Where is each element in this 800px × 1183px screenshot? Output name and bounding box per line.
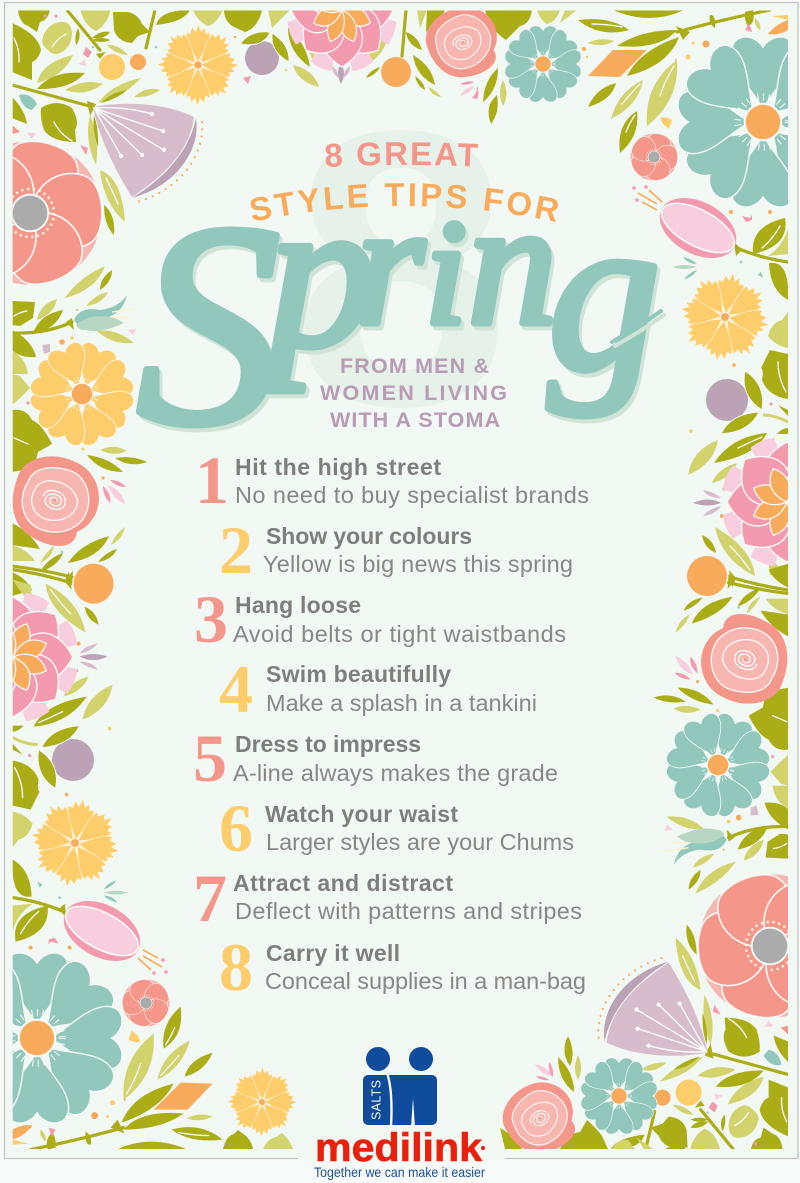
tagline: Together we can make it easier <box>314 1164 485 1180</box>
foliage: lower half of border <box>12 564 789 1152</box>
tip 3: 3 <box>194 581 228 657</box>
tip 5: Dress to impress <box>235 731 421 757</box>
logo: medilink <box>314 1047 485 1180</box>
subheading: WITH A STOMA <box>330 408 500 432</box>
tip 1: No need to buy specialist brands <box>235 482 589 508</box>
tip 2: 2 <box>219 512 253 588</box>
watermark numeral 8: 8 <box>292 50 510 488</box>
swash on g <box>612 311 661 342</box>
flower: right rose <box>701 614 788 704</box>
flower: top rose <box>426 10 497 78</box>
flower: top teal daisy <box>505 26 581 102</box>
flower: top pink lotus <box>288 10 396 71</box>
flower: right pink lotus <box>722 438 788 566</box>
tip 3: Avoid belts or tight waistbands <box>233 621 566 647</box>
wordmark: medilink <box>315 1126 483 1170</box>
flower: left coral anemone <box>12 142 102 285</box>
heading: style tips for: STYLE TIPS FOR <box>250 183 558 222</box>
tip 6 <box>219 790 574 866</box>
tip 3: Hang loose <box>235 592 361 618</box>
registered mark <box>481 1146 485 1150</box>
flower: bottom teal daisy <box>581 1058 657 1134</box>
tip 6: 6 <box>219 790 253 866</box>
heading: 8 great: 8 GREAT <box>326 142 478 167</box>
flower: lower left tulip <box>64 901 168 975</box>
heading: Spring script title: S <box>136 164 281 485</box>
foliage: upper half of border <box>12 8 788 596</box>
flower: right coral anemone <box>698 874 788 1018</box>
foliage: top centre <box>54 10 614 124</box>
tip 2: Show your colours <box>266 523 472 549</box>
flower: left pink lotus <box>12 592 78 721</box>
tip 4: Make a splash in a tankini <box>266 690 537 716</box>
flower: bottom right mauve bud <box>598 958 708 1056</box>
tip 7: Attract and distract <box>233 870 453 896</box>
logo mark: two figures: SALTS <box>370 1080 384 1120</box>
tip 5: 5 <box>193 720 227 796</box>
tip 4 <box>219 651 537 727</box>
tip 8: 8 <box>219 929 253 1005</box>
tip 6: Watch your waist <box>265 801 458 827</box>
tip 5 <box>193 720 558 796</box>
subheading <box>320 354 507 432</box>
tip 7 <box>193 860 582 936</box>
flower: top right small anemone <box>630 134 678 180</box>
flower: top yellow flower <box>157 24 239 106</box>
flower: bottom left small anemone <box>122 980 170 1026</box>
flower: lower left yellow flower <box>30 798 120 888</box>
tip 6: Larger styles are your Chums <box>266 829 574 855</box>
flower: top left mauve bud <box>93 104 202 202</box>
tip 1: Hit the high street <box>235 454 441 480</box>
heading: Spring script title: i <box>425 190 467 356</box>
flower: bottom yellow flower <box>227 1067 297 1137</box>
logo mark: two figures <box>363 1047 437 1127</box>
flower: upper right yellow flower <box>680 272 770 362</box>
tip 7: 7 <box>193 860 227 936</box>
flower: left yellow daisy <box>30 342 134 446</box>
tip 8: Conceal supplies in a man-bag <box>265 968 586 994</box>
tip 7: Deflect with patterns and stripes <box>235 898 582 924</box>
subheading: WOMEN LIVING <box>320 381 507 405</box>
tip 2: Yellow is big news this spring <box>263 551 573 577</box>
flower: left rose <box>12 456 99 546</box>
tip 1 <box>195 442 589 518</box>
heading: Spring script title: n <box>468 164 557 362</box>
foliage: bottom centre <box>223 1036 685 1149</box>
flower: bottom rose <box>502 1082 576 1149</box>
tip 8 <box>219 929 586 1005</box>
tip 5: A-line always makes the grade <box>233 760 558 786</box>
flower: top right large teal daisy <box>678 38 788 206</box>
circle: right mauve berry <box>706 379 748 421</box>
tip 2 <box>219 512 573 588</box>
flower: right teal daisy <box>666 714 770 816</box>
flower: upper right tulip <box>632 185 736 258</box>
tip 8: Carry it well <box>266 940 400 966</box>
circle: top mauve berry <box>245 41 279 75</box>
heading: Spring script title: g <box>548 167 660 417</box>
subheading: FROM MEN & <box>340 354 489 378</box>
heading: Spring script title: r <box>356 167 425 361</box>
tip 1: 1 <box>195 442 229 518</box>
heading: Spring script title: p <box>255 153 376 392</box>
tip 4: Swim beautifully <box>266 661 451 687</box>
tip 3 <box>194 581 566 657</box>
flower: bottom left large teal daisy <box>12 954 122 1122</box>
circle: left mauve berry <box>52 739 94 781</box>
tip 4: 4 <box>219 651 253 727</box>
